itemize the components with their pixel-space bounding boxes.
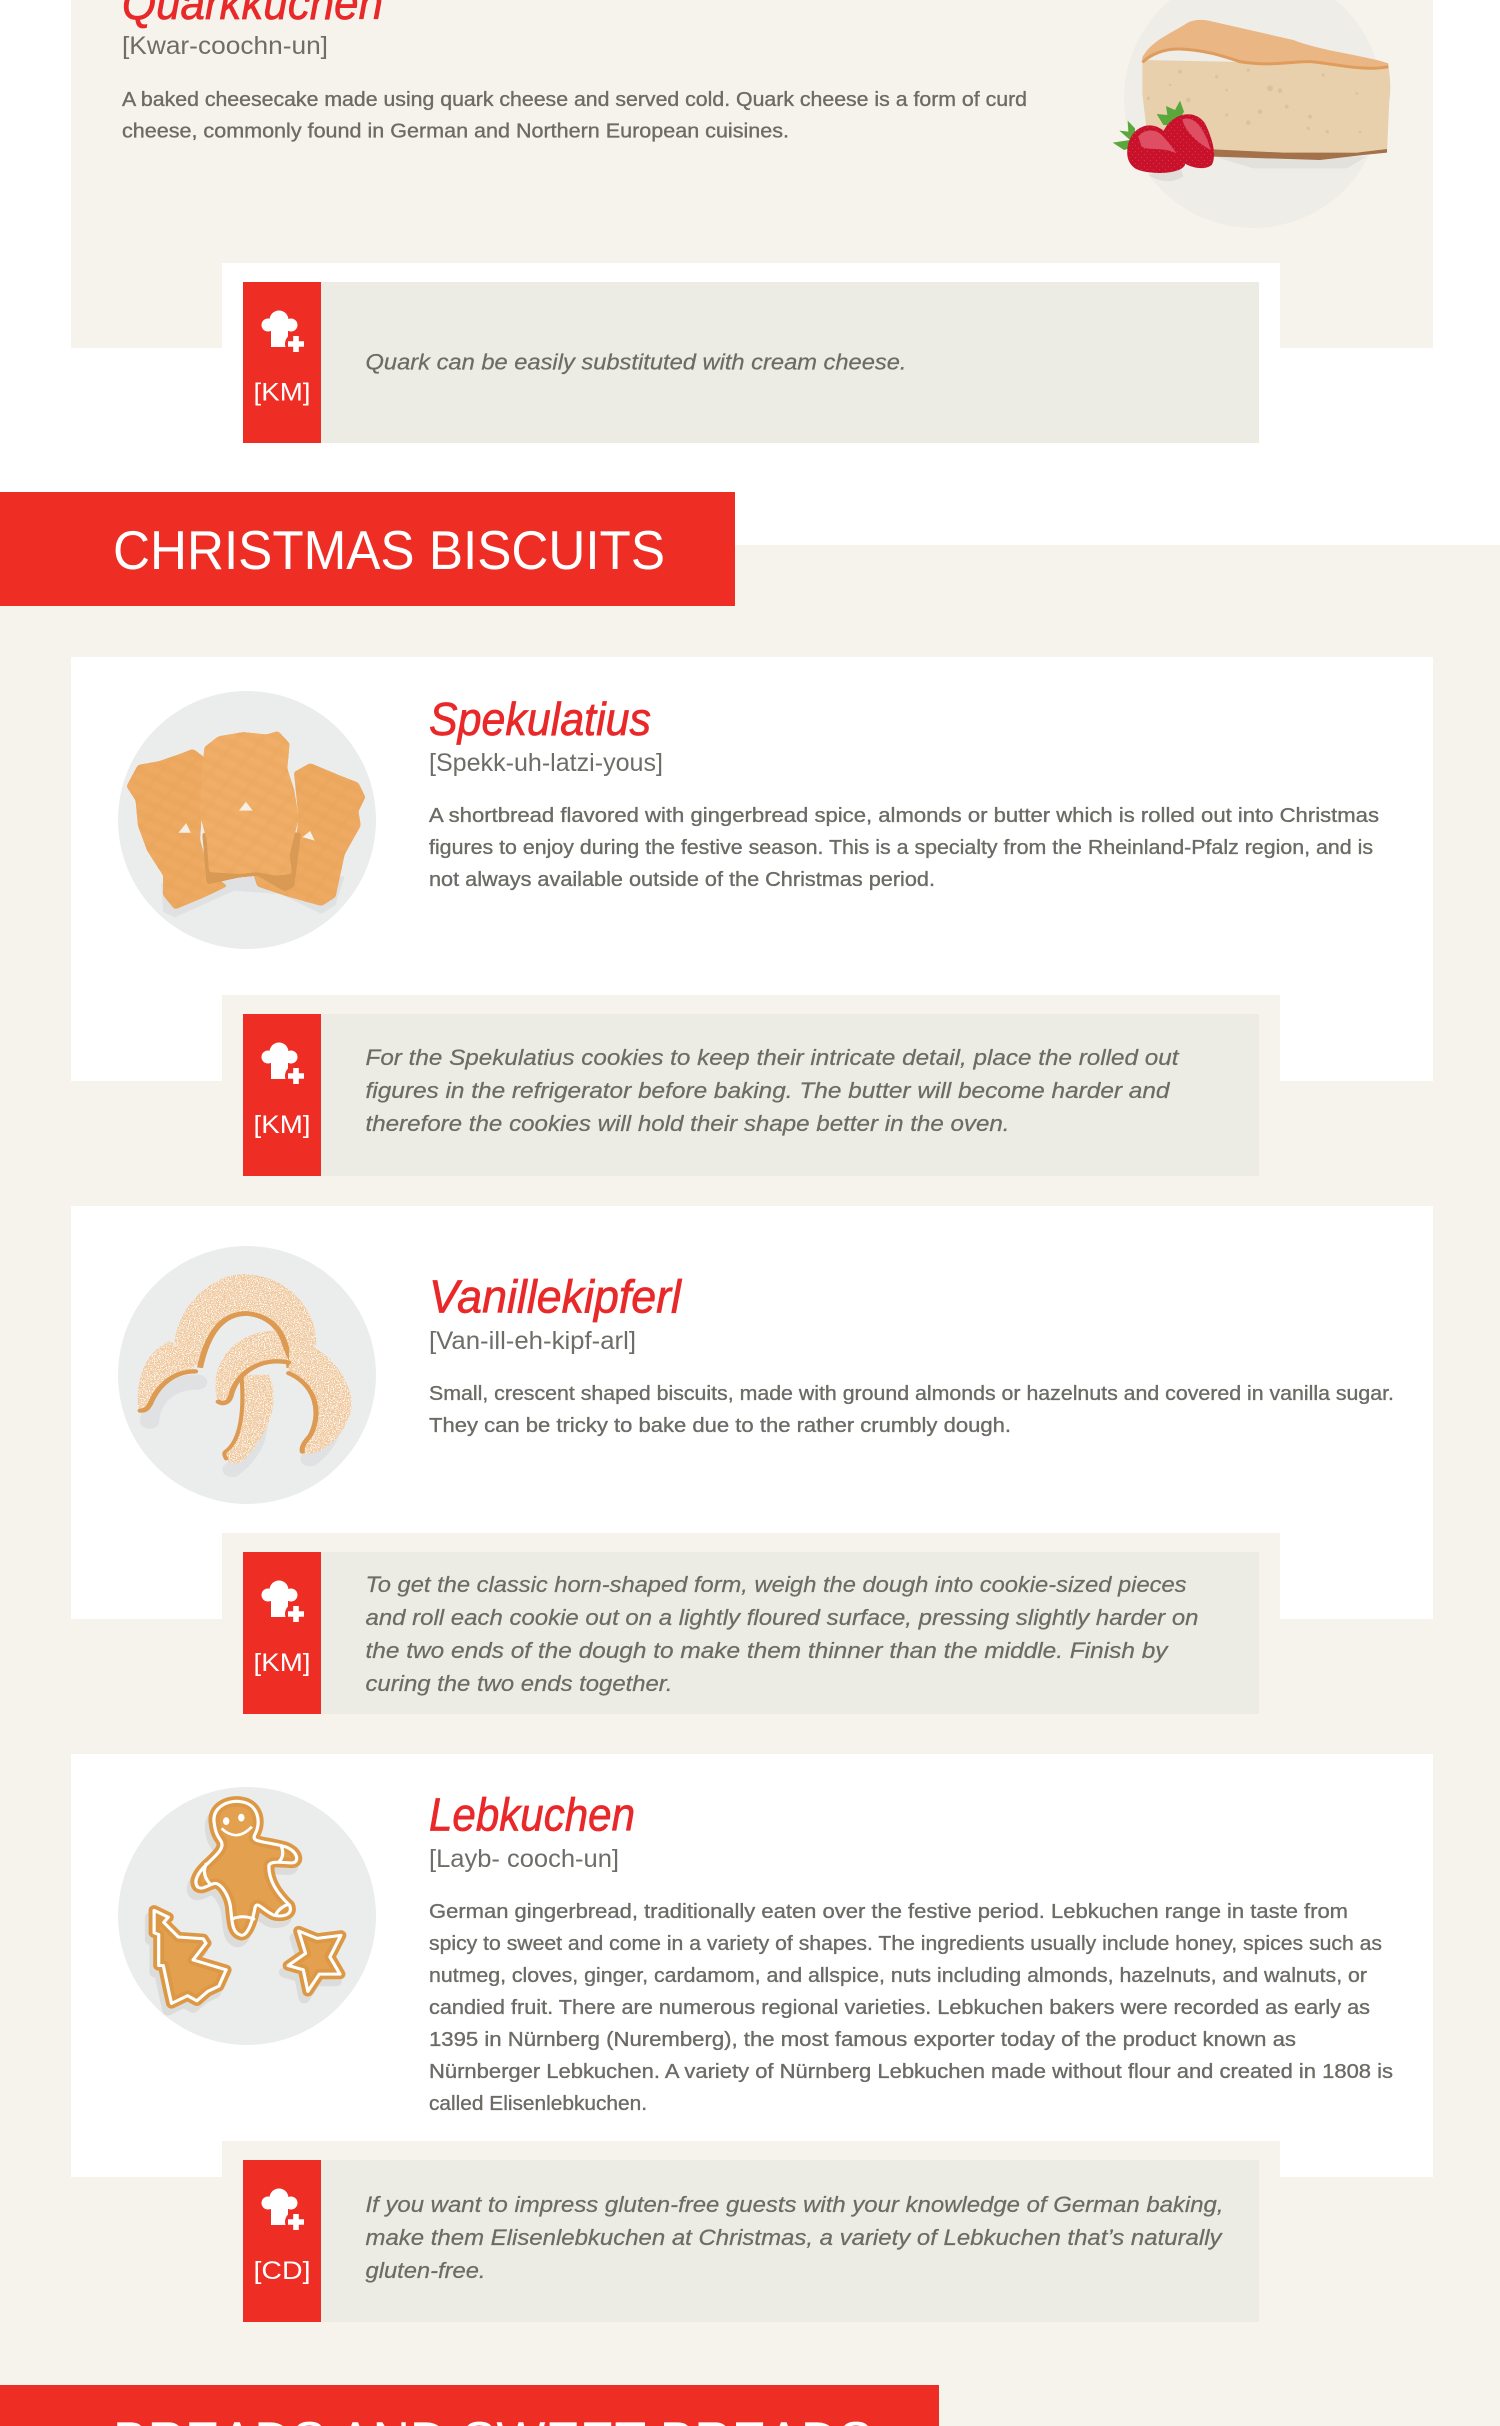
panel: Lebkuchen: [71, 1754, 1433, 2241]
tip: Lebkuchen: [243, 2160, 1259, 2322]
tip text: To get the classic horn-shaped form, weigh the dough into cookie-sized pieces: [366, 1572, 1186, 1597]
icon: chef hat plus: [262, 1580, 307, 1625]
tip text: [366, 1572, 1198, 1696]
crescent: centre lower: [224, 1375, 274, 1463]
title: Vanillekipferl: Vanillekipferl: [429, 1270, 683, 1322]
pronunciation: [Spekk-uh-latzi-yous]: [429, 749, 663, 777]
tip: Vanillekipferl: [243, 1552, 1259, 1714]
tip author badge: [KM]: [254, 1649, 310, 1677]
description: Nürnberger Lebkuchen. A variety of Nürnberg Lebkuchen made without flour and created in 1808 is: [429, 2061, 1393, 2083]
tip text: [366, 2192, 1224, 2283]
tip text: make them Elisenlebkuchen at Christmas, a variety of Lebkuchen that’s naturally: [366, 2225, 1223, 2250]
icon: chef hat plus: [262, 310, 307, 355]
description: not always available outside of the Christmas period.: [429, 869, 935, 891]
crescent: centre upper: [215, 1330, 289, 1403]
icon: spekulatius cookies on plate: [118, 691, 376, 949]
description: A shortbread flavored with gingerbread spice, almonds or butter which is rolled out into Christmas: [429, 805, 1379, 827]
crescent: right: [289, 1339, 352, 1454]
pronunciation: [Kwar-coochn-un]: [122, 32, 328, 60]
description: [429, 1383, 1394, 1437]
description: German gingerbread, traditionally eaten over the festive period. Lebkuchen range in taste from: [429, 1901, 1348, 1923]
title: Spekulatius: Spekulatius: [429, 693, 651, 745]
tip: Quark substitute: [222, 263, 1280, 463]
tip text: [366, 1045, 1180, 1136]
tip text: figures in the refrigerator before baking. The butter will become harder and: [366, 1078, 1171, 1103]
description: Small, crescent shaped biscuits, made with ground almonds or hazelnuts and covered in vanilla sugar.: [429, 1383, 1394, 1405]
icon: cheesecake on plate: [1113, 0, 1390, 228]
description: called Elisenlebkuchen.: [429, 2093, 647, 2115]
tip author badge: [243, 1014, 321, 1176]
description: [122, 89, 1027, 142]
description: They can be tricky to bake due to the rather crumbly dough.: [429, 1415, 1011, 1437]
crescent: back arch: [175, 1274, 316, 1368]
section heading: Christmas Biscuits: CHRISTMAS BISCUITS: [113, 519, 665, 581]
icon: chef hat plus: [262, 1042, 307, 1087]
tip: Spekulatius: [243, 1014, 1259, 1176]
tip text: curing the two ends together.: [366, 1671, 672, 1696]
description: candied fruit. There are numerous regional varieties. Lebkuchen bakers were recorded as early as: [429, 1997, 1370, 2019]
tip text: the two ends of the dough to make them thinner than the middle. Finish by: [366, 1638, 1169, 1663]
tip author badge: [243, 1552, 321, 1714]
description: 1395 in Nürnberg (Nuremberg), the most famous exporter today of the product known as: [429, 2029, 1296, 2051]
tip author badge: [CD]: [254, 2257, 310, 2285]
description: [429, 805, 1379, 891]
tip text: For the Spekulatius cookies to keep their intricate detail, place the rolled out: [366, 1045, 1180, 1070]
page background: beige lower section: [0, 545, 1500, 2426]
tip text: Quark can be easily substituted with cream cheese.: [366, 350, 906, 374]
description: spicy to sweet and come in a variety of shapes. The ingredients usually include honey, spices such as: [429, 1933, 1382, 1955]
panel: Quarkkuchen: [71, 0, 1433, 348]
description: A baked cheesecake made using quark cheese and served cold. Quark cheese is a form of curd: [122, 89, 1027, 111]
description: figures to enjoy during the festive season. This is a specialty from the Rheinland-Pfalz region, and is: [429, 837, 1373, 859]
description: [429, 1901, 1393, 2115]
panel: Vanillekipferl: [71, 1206, 1433, 1633]
tip text: and roll each cookie out on a lightly floured surface, pressing slightly harder on: [366, 1605, 1198, 1630]
icon: gingerbread cookies on plate: [118, 1787, 376, 2045]
section heading: Christmas Biscuits: [0, 492, 735, 606]
strawberries: [1113, 101, 1214, 173]
panel: Spekulatius: [71, 657, 1433, 1095]
tip text: therefore the cookies will hold their shape better in the oven.: [366, 1111, 1010, 1136]
icon: chef hat plus: [262, 2188, 307, 2233]
crescent: left: [138, 1341, 198, 1411]
pronunciation: [Van-ill-eh-kipf-arl]: [429, 1327, 636, 1355]
section heading: Breads and Sweet Breads: [0, 2385, 939, 2426]
description: nutmeg, cloves, ginger, cardamom, and allspice, nuts including almonds, hazelnuts, and walnuts, or: [429, 1965, 1367, 1987]
tip author badge: [KM]: [254, 378, 310, 406]
tip author badge: [KM]: [254, 1111, 310, 1139]
tip text: gluten-free.: [366, 2258, 486, 2283]
tip author badge: [243, 2160, 321, 2322]
tip author badge: [243, 282, 321, 443]
tip text: If you want to impress gluten-free guests with your knowledge of German baking,: [366, 2192, 1224, 2217]
description: cheese, commonly found in German and Northern European cuisines.: [122, 120, 789, 142]
pronunciation: [Layb- cooch-un]: [429, 1845, 619, 1873]
title: Lebkuchen: Lebkuchen: [429, 1788, 635, 1840]
icon: vanillekipferl on plate: [118, 1246, 376, 1504]
